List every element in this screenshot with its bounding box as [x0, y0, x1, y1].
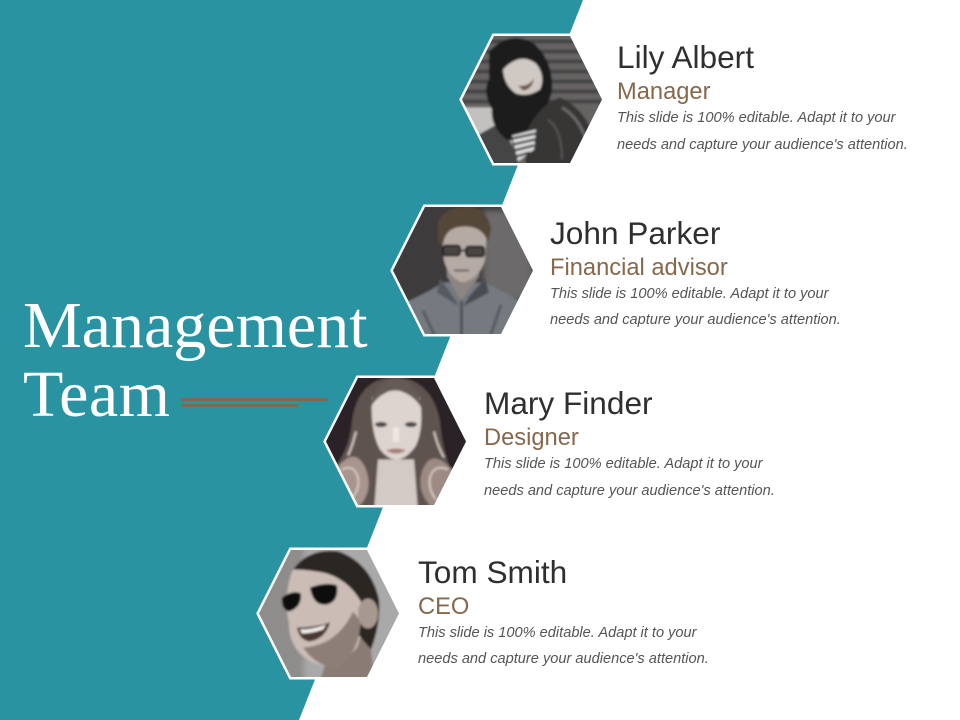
- name and text: Lily Albert: [617, 39, 908, 153]
- name and text: Lily Albert: needs and capture your audience's attention.: [617, 137, 908, 153]
- title accent lines: [181, 398, 328, 407]
- name and text: Mary Finder: This slide is 100% editable. Adapt it to your: [484, 456, 764, 472]
- portrait: Mary Finder: [323, 376, 466, 508]
- name and text: Tom Smith: [418, 554, 709, 667]
- team member: Mary Finder: [321, 372, 775, 512]
- name and text: John Parker: John Parker: [550, 215, 720, 251]
- name and text: John Parker: This slide is 100% editable. Adapt it to your: [550, 286, 830, 302]
- portrait: John Parker: [390, 204, 533, 336]
- name and text: Lily Albert: Lily Albert: [617, 39, 754, 75]
- name and text: Lily Albert: This slide is 100% editable. Adapt it to your: [617, 110, 897, 126]
- name and text: Mary Finder: needs and capture your audience's attention.: [484, 483, 775, 499]
- name and text: Mary Finder: Designer: [484, 425, 579, 451]
- name and text: Mary Finder: [484, 385, 775, 499]
- name and text: Lily Albert: Manager: [617, 79, 711, 105]
- title: Team: [23, 358, 170, 431]
- team member: John Parker: [388, 200, 841, 340]
- name and text: Mary Finder: Mary Finder: [484, 385, 653, 421]
- name and text: John Parker: Financial advisor: [550, 255, 728, 281]
- portrait: Lily Albert: [459, 34, 602, 166]
- teal diagonal background panel: [0, 0, 583, 720]
- name and text: Tom Smith: Tom Smith: [418, 554, 567, 590]
- title: [23, 289, 368, 431]
- team member: Tom Smith: [254, 544, 709, 684]
- portrait: Tom Smith: [256, 548, 399, 680]
- name and text: John Parker: [550, 215, 841, 328]
- name and text: Tom Smith: needs and capture your audience's attention.: [418, 651, 709, 667]
- title: Management: [23, 289, 368, 362]
- name and text: Tom Smith: CEO: [418, 594, 469, 620]
- team member: Lily Albert: [457, 30, 908, 170]
- name and text: John Parker: needs and capture your audience's attention.: [550, 312, 841, 328]
- name and text: Tom Smith: This slide is 100% editable. Adapt it to your: [418, 625, 698, 641]
